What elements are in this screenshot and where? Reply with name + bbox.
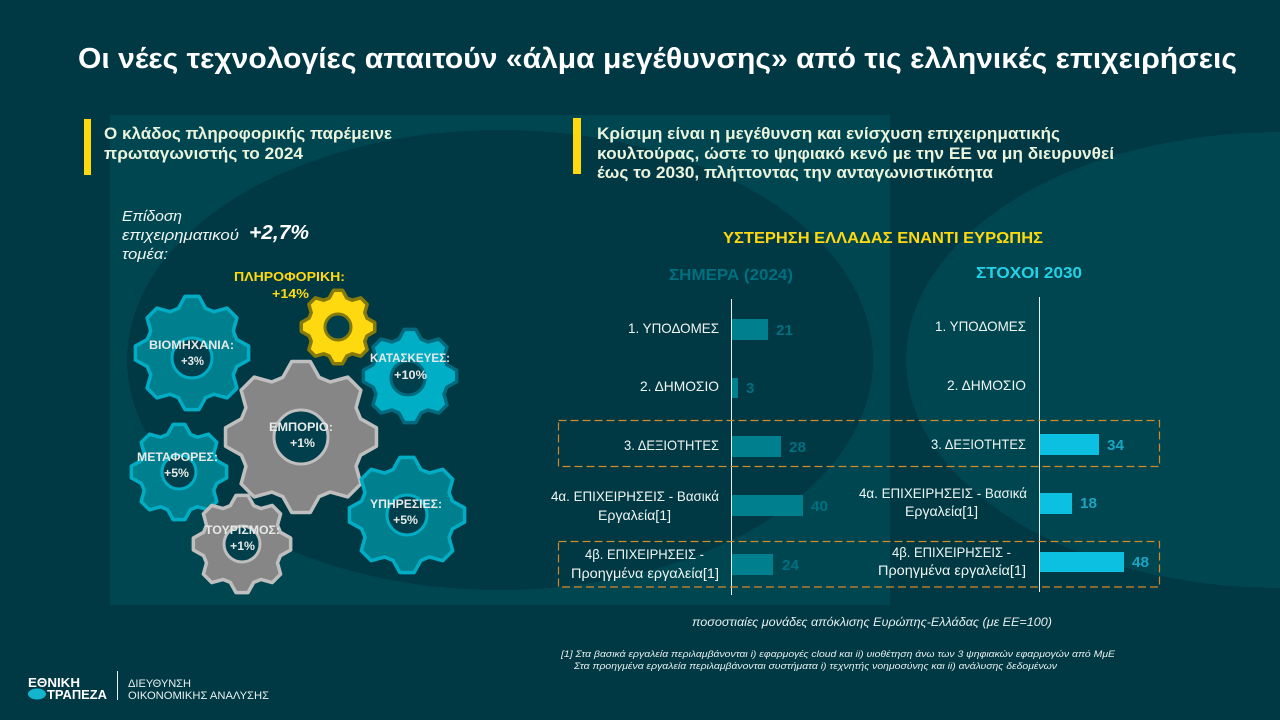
bar chart: today 2024: Εργαλεία[1] [598, 507, 671, 523]
bar chart: today 2024: 4β. ΕΠΙΧΕΙΡΗΣΕΙΣ - [585, 546, 704, 562]
bar chart: targets 2030: ΣΤΟΧΟΙ 2030 [976, 265, 1082, 282]
bar chart: targets 2030: Προηγμένα εργαλεία[1] [878, 562, 1026, 578]
bar chart: today 2024: 40 [811, 498, 828, 515]
title: Οι νέες τεχνολογίες απαιτούν «άλμα μεγέθυνσης» από τις ελληνικές επιχειρήσεις [78, 43, 1237, 75]
gear: ΥΠΗΡΕΣΙΕΣ: ΥΠΗΡΕΣΙΕΣ: [370, 497, 442, 511]
gear: ΜΕΤΑΦΟΡΕΣ: +5% [164, 466, 189, 480]
bar chart: today 2024: ΣΗΜΕΡΑ (2024) [669, 267, 793, 284]
bar chart: today 2024: 2. ΔΗΜΟΣΙΟ [640, 378, 719, 394]
bar chart: targets 2030 [859, 265, 1149, 592]
gear: ΠΛΗΡΟΦΟΡΙΚΗ: +14% [272, 286, 309, 301]
gear: ΠΛΗΡΟΦΟΡΙΚΗ [234, 269, 375, 364]
gear: ΚΑΤΑΣΚΕΥΕΣ: ΚΑΤΑΣΚΕΥΕΣ: [370, 351, 450, 365]
gear: ΥΠΗΡΕΣΙΕΣ: +5% [393, 513, 418, 527]
panel: left heading: πρωταγωνιστής το 2024 [104, 144, 304, 163]
bar chart: targets 2030: 1. ΥΠΟΔΟΜΕΣ [935, 318, 1026, 334]
bar chart: today 2024: 28 [789, 439, 806, 456]
gear: ΕΜΠΟΡΙΟ: ΕΜΠΟΡΙΟ: [269, 420, 333, 434]
gear: ΠΛΗΡΟΦΟΡΙΚΗ: ΠΛΗΡΟΦΟΡΙΚΗ: [234, 269, 345, 284]
gear: ΤΟΥΡΙΣΜΟΣ: ΤΟΥΡΙΣΜΟΣ: [205, 523, 280, 537]
bar chart: targets 2030: Εργαλεία[1] [905, 503, 978, 519]
footnote: [1] Στα βασικά εργαλεία περιλαμβάνονται i) εφαρμογές cloud και ii) υιοθέτηση άνω των 3 ψηφιακών εφαρμογών από ΜμΕ [560, 649, 1116, 660]
gear: ΥΠΗΡΕΣΙΕΣ [349, 457, 465, 573]
callout: skills highlight box [558, 420, 1160, 466]
gear: ΕΜΠΟΡΙΟ [226, 362, 376, 512]
gear: ΒΙΟΜΗΧΑΝΙΑ [135, 296, 249, 410]
panel: right heading: έως το 2030, πλήττοντας την ανταγωνιστικότητα [597, 163, 994, 182]
panel: left heading [84, 119, 392, 175]
chart heading: ΥΣΤΕΡΗΣΗ ΕΛΛΑΔΑΣ ΕΝΑΝΤΙ ΕΥΡΩΠΗΣ [723, 230, 1043, 247]
panel: left heading: Ο κλάδος πληροφορικής παρέμεινε [104, 124, 392, 143]
gear: ΒΙΟΜΗΧΑΝΙΑ: ΒΙΟΜΗΧΑΝΙΑ: [149, 338, 234, 352]
bar chart: today 2024: 21 [776, 322, 793, 339]
bar chart: targets 2030: 18 [1080, 495, 1097, 512]
chart unit note: ποσοστιαίες μονάδες απόκλισης Ευρώπης-Ελλάδας (με ΕΕ=100) [692, 615, 1052, 629]
text block: business sector performance [122, 208, 309, 263]
gear: ΚΑΤΑΣΚΕΥΕΣ [363, 329, 457, 423]
bar chart: today 2024: 24 [782, 557, 800, 574]
callout: advanced tools highlight box [558, 542, 1160, 587]
gear: ΜΕΤΑΦΟΡΕΣ [131, 424, 227, 520]
logo: bank: ΤΡΑΠΕΖΑ [47, 688, 107, 702]
text block: business sector performance: τομέα: [122, 246, 168, 263]
gear: ΒΙΟΜΗΧΑΝΙΑ: +3% [181, 354, 204, 368]
gear: ΕΜΠΟΡΙΟ: +1% [290, 436, 315, 450]
divider label: department [117, 671, 269, 702]
bar chart: targets 2030: 4α. ΕΠΙΧΕΙΡΗΣΕΙΣ - Βασικά [859, 485, 1027, 501]
text block: business sector performance: Επίδοση [122, 208, 182, 225]
gear: ΤΟΥΡΙΣΜΟΣ [193, 495, 291, 593]
bar chart: today 2024 [551, 267, 828, 595]
logo: bank [28, 676, 107, 702]
panel: right heading [573, 118, 1114, 182]
bar chart: targets 2030: 4β. ΕΠΙΧΕΙΡΗΣΕΙΣ - [892, 544, 1011, 560]
bar chart: today 2024: 3 [746, 380, 754, 397]
footnote: Στα προηγμένα εργαλεία περιλαμβάνονται συστήματα i) τεχνητής νοημοσύνης και ii) ανάλυσης δεδομένων [573, 661, 1057, 672]
bar chart: targets 2030: 3. ΔΕΞΙΟΤΗΤΕΣ [931, 436, 1026, 452]
gear: ΚΑΤΑΣΚΕΥΕΣ: +10% [394, 368, 427, 382]
bar chart: targets 2030: 34 [1107, 437, 1125, 454]
footnote [560, 649, 1116, 672]
panel: right heading: Κρίσιμη είναι η μεγέθυνση και ενίσχυση επιχειρηματικής [597, 124, 1060, 143]
bar chart: targets 2030: 48 [1132, 554, 1149, 571]
bar chart: targets 2030: 2. ΔΗΜΟΣΙΟ [947, 377, 1026, 393]
bar chart: today 2024: 4α. ΕΠΙΧΕΙΡΗΣΕΙΣ - Βασικά [551, 488, 719, 504]
divider label: department: ΔΙΕΥΘΥΝΣΗ [128, 678, 191, 690]
logo: bank: ΕΘΝΙΚΗ [28, 676, 80, 690]
gear: ΜΕΤΑΦΟΡΕΣ: ΜΕΤΑΦΟΡΕΣ: [137, 450, 218, 464]
bar chart: today 2024: Προηγμένα εργαλεία[1] [571, 565, 719, 581]
divider label: department: ΟΙΚΟΝΟΜΙΚΗΣ ΑΝΑΛΥΣΗΣ [128, 690, 269, 702]
bar chart: today 2024: 1. ΥΠΟΔΟΜΕΣ [628, 320, 719, 336]
text block: business sector performance: επιχειρηματικού [122, 227, 239, 244]
panel: right heading: κουλτούρας, ώστε το ψηφιακό κενό με την ΕΕ να μη διευρυνθεί [597, 144, 1114, 163]
text block: business sector performance: +2,7% [249, 222, 309, 244]
bar chart: today 2024: 3. ΔΕΞΙΟΤΗΤΕΣ [624, 437, 719, 453]
gear: ΤΟΥΡΙΣΜΟΣ: +1% [230, 539, 255, 553]
